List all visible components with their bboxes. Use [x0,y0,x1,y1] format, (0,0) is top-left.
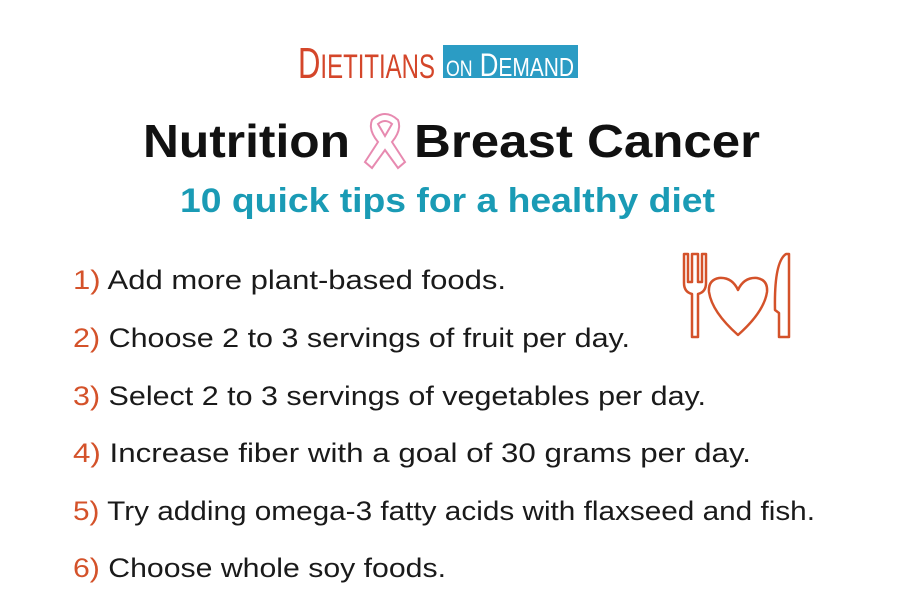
logo: DIETITIANS [298,39,435,88]
logo: ON DEMAND [446,47,574,83]
subtitle: 10 quick tips for a healthy diet [180,182,715,220]
tip 2: 2) Choose 2 to 3 servings of fruit per day. [73,323,630,353]
tip 6: 6) Choose whole soy foods. [73,553,446,583]
title [143,114,760,168]
icon: pink ribbon [365,114,405,168]
logo [298,39,578,88]
icon: fork heart knife [684,254,789,337]
tip 4: 4) Increase fiber with a goal of 30 grams per day. [73,438,751,468]
title: Nutrition [143,115,350,167]
title: Breast Cancer [414,115,760,167]
tip 3: 3) Select 2 to 3 servings of vegetables per day. [73,381,706,411]
tip 5: 5) Try adding omega-3 fatty acids with flaxseed and fish. [73,496,815,526]
tips list [73,265,815,583]
tip 1: 1) Add more plant-based foods. [73,265,506,295]
